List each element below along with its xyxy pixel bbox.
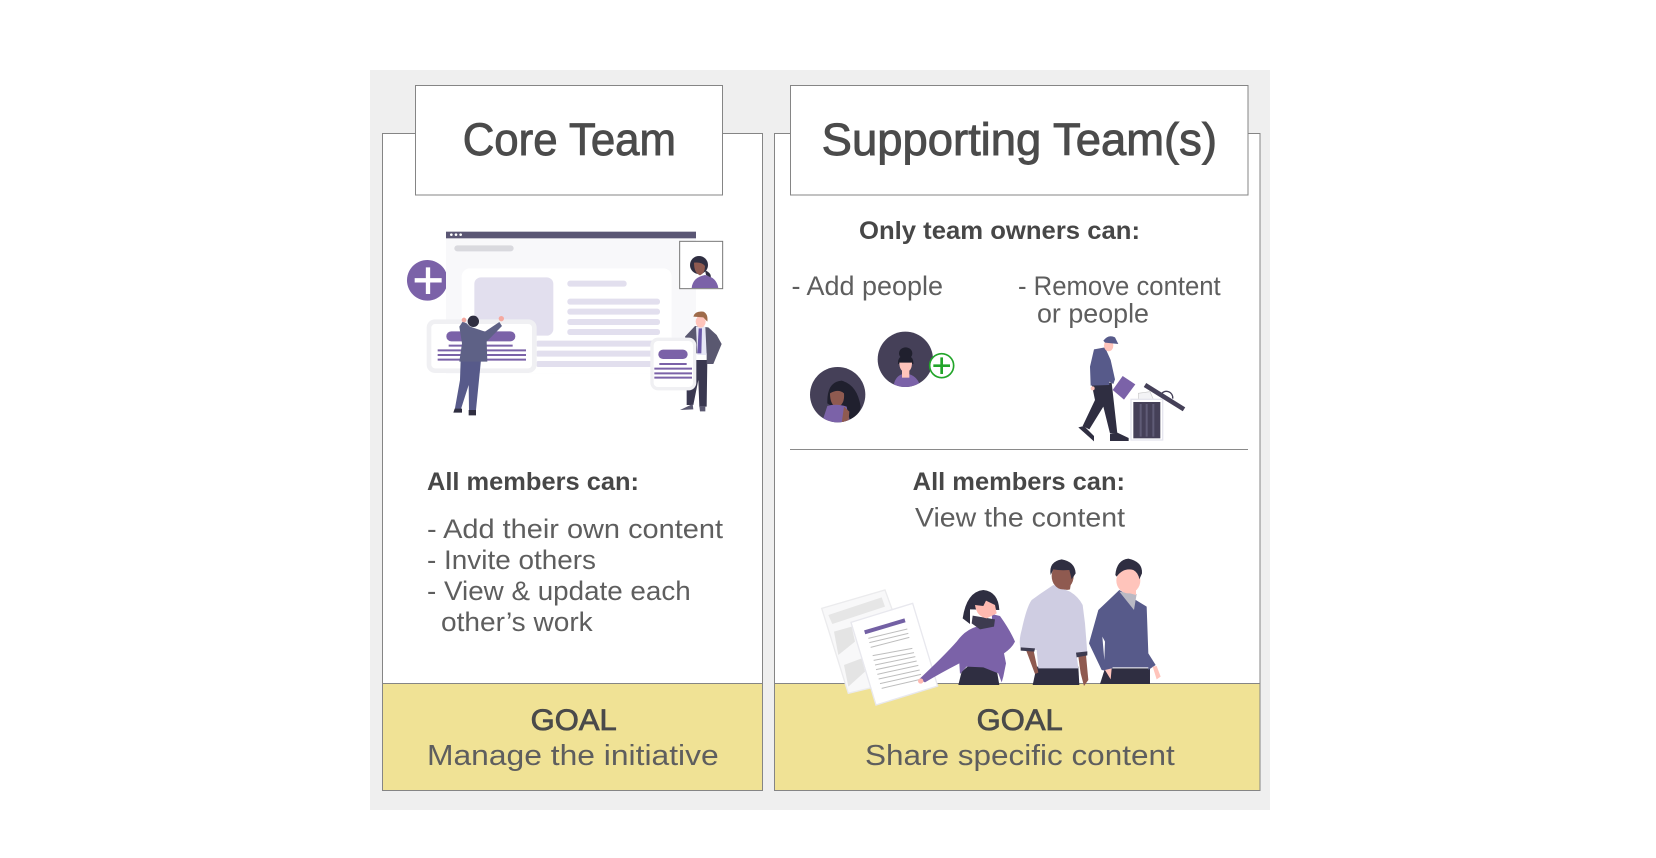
person reaching up at the card: [453, 316, 504, 415]
avatar frame: [680, 241, 723, 289]
documents: [822, 590, 938, 705]
core team goal band: [382, 684, 762, 790]
goal background: [774, 684, 1260, 790]
avatar: woman with long hair: [810, 367, 865, 423]
person: woman in purple sweater: [918, 590, 1015, 685]
all members can heading: All members can:: [913, 468, 1125, 496]
avatar: woman with hair bun: [878, 332, 933, 388]
goal label: GOAL: [977, 704, 1063, 737]
supporting team goal band: [774, 684, 1260, 790]
illustration: team editing a web page: [407, 232, 723, 415]
list of member abilities: - Invite others: [427, 545, 596, 575]
title text: Supporting Team(s): [822, 114, 1217, 165]
title text: Core Team: [463, 114, 676, 165]
list of member abilities: - View & update each: [427, 576, 691, 606]
illustration: person throwing paper in trash: [1078, 336, 1184, 441]
illustration: owner actions: [810, 332, 1184, 441]
supporting team card: [774, 134, 1260, 790]
supporting team title box: [790, 86, 1248, 195]
illustration: team with documents: [822, 559, 1161, 705]
view the content text: View the content: [915, 503, 1126, 533]
core team card: [382, 134, 762, 790]
title frame: [790, 86, 1248, 195]
list of member abilities: other’s work: [441, 607, 593, 637]
panel: supporting teams: [774, 86, 1260, 790]
person: man in blue shirt: [1089, 559, 1161, 684]
add people text: - Add people: [792, 271, 943, 301]
title frame: [416, 86, 722, 195]
person: man in light sweater: [1020, 559, 1088, 686]
only team owners heading: Only team owners can:: [859, 217, 1140, 245]
goal background: [382, 684, 762, 790]
goal description: Share specific content: [865, 740, 1175, 772]
person holding card: [680, 312, 722, 411]
grey background panel: [370, 70, 1270, 810]
core team title box: [416, 86, 722, 195]
panel: core team: [382, 86, 762, 790]
remove content text: or people: [1037, 299, 1149, 329]
all members can heading: All members can:: [427, 468, 639, 496]
goal label: GOAL: [531, 704, 617, 737]
remove content text: [1018, 271, 1221, 329]
infographic: [370, 70, 1270, 810]
right content card: [652, 339, 695, 389]
remove content text: - Remove content: [1018, 271, 1221, 301]
icon: purple add button: [407, 260, 446, 301]
section divider: [790, 448, 1248, 450]
goal description: Manage the initiative: [427, 740, 719, 772]
browser window: [446, 232, 696, 373]
list of member abilities: - Add their own content: [427, 514, 724, 544]
list of member abilities: [427, 514, 724, 637]
left content card: [429, 322, 534, 371]
icon: green add badge: [930, 354, 954, 378]
